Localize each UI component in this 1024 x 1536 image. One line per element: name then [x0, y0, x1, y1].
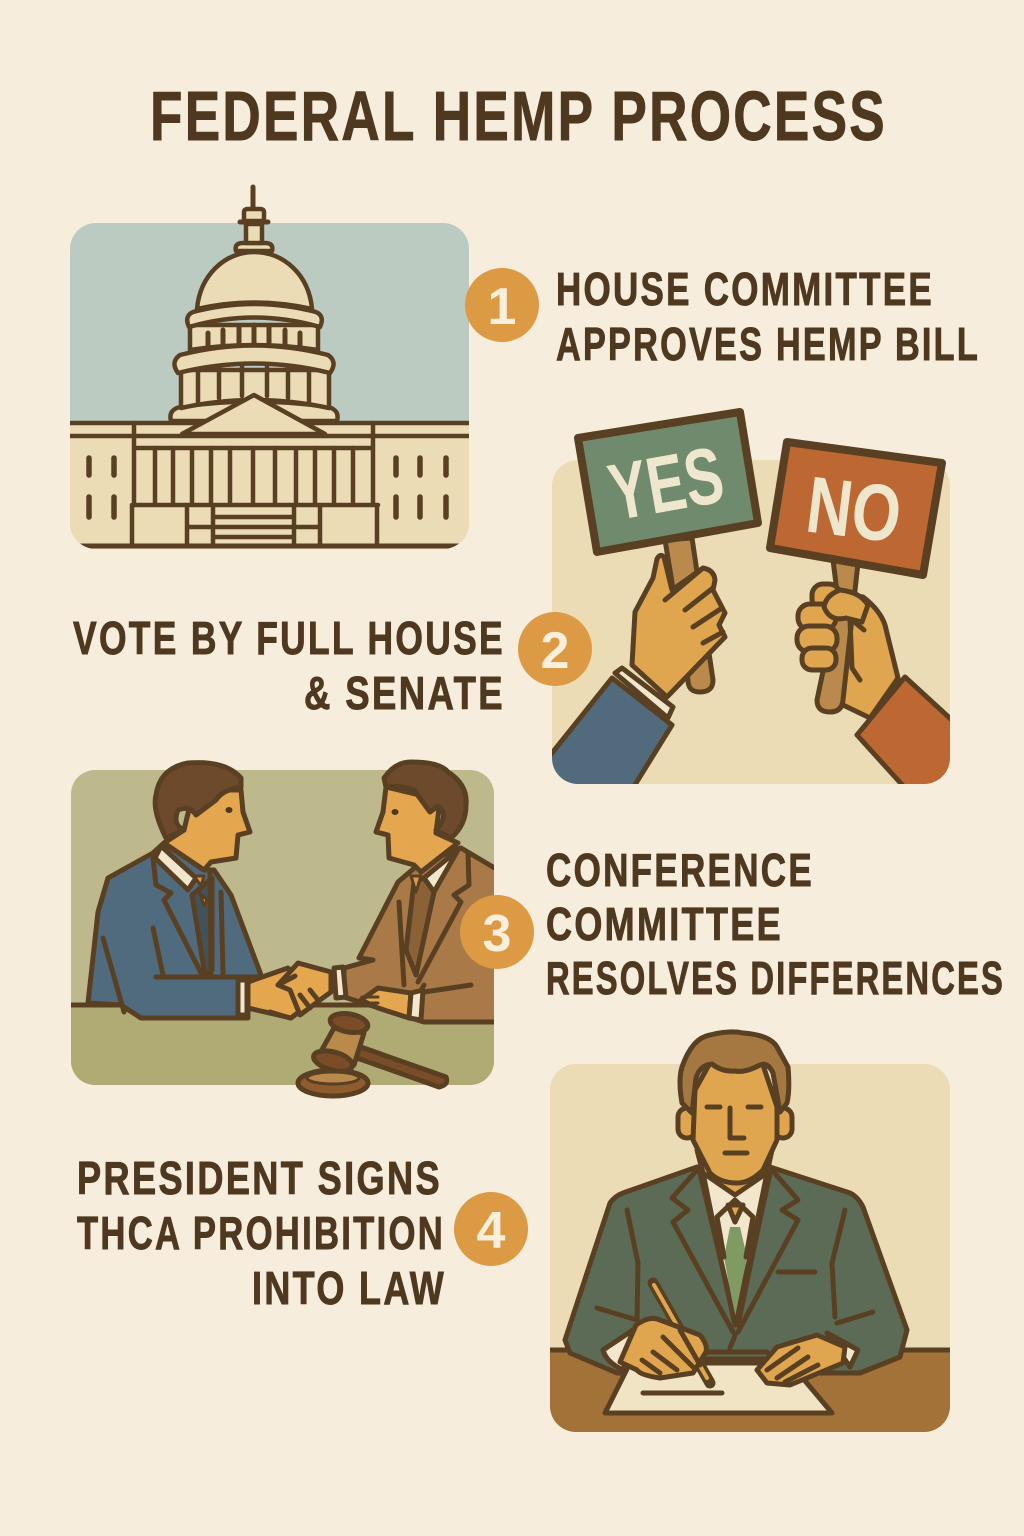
left cuff	[603, 1330, 633, 1370]
step 3 badge: 3	[483, 905, 511, 963]
step 2 badge: 2	[541, 622, 569, 680]
left man's head	[155, 763, 250, 870]
gavel	[298, 1011, 447, 1096]
shirt and tie	[697, 1150, 772, 1320]
step 3 label	[546, 844, 1005, 1004]
sleeve: blue	[548, 678, 672, 788]
step 1 label	[556, 263, 980, 370]
panel: capitol illustration	[70, 187, 469, 552]
step 4 label: THCA PROHIBITION	[77, 1207, 445, 1259]
right cuff	[827, 1333, 858, 1367]
hand: no, fingers	[797, 584, 868, 680]
step 3 label: CONFERENCE	[546, 844, 814, 896]
sign: yes: YES	[602, 430, 730, 537]
sign stick: no	[817, 560, 858, 712]
sleeve: orange	[857, 677, 954, 788]
handshake	[238, 963, 423, 1020]
head	[678, 1032, 792, 1183]
left man's suit	[88, 843, 261, 1018]
right man's head	[376, 762, 466, 872]
right man's suit	[344, 848, 498, 1022]
step 2 label	[73, 612, 505, 719]
sign stick: yes	[665, 538, 713, 692]
sign: yes	[578, 412, 758, 552]
step 1 badge	[465, 268, 539, 342]
step 2 label: VOTE BY FULL HOUSE	[73, 612, 505, 664]
step 3 badge	[460, 895, 534, 969]
pen	[653, 1283, 710, 1383]
panel: president signing	[546, 1032, 954, 1440]
step 2 label: & SENATE	[304, 667, 505, 719]
step 4 label: INTO LAW	[252, 1262, 446, 1314]
panel: handshake negotiators	[68, 762, 498, 1096]
left hand	[620, 1318, 706, 1378]
hand: yes	[632, 555, 725, 697]
right hand	[757, 1335, 845, 1385]
suit	[565, 1167, 907, 1373]
step 3 label: COMMITTEE	[546, 898, 783, 950]
step 4 label	[77, 1152, 446, 1314]
hand: no, back	[826, 593, 898, 718]
step 4 badge: 4	[477, 1202, 506, 1260]
paper	[605, 1363, 832, 1413]
panel: yes and no hands	[548, 412, 954, 788]
cuff: blue sleeve	[615, 668, 673, 718]
sign: no: NO	[802, 460, 906, 559]
lapels	[597, 1170, 873, 1359]
step 1 badge: 1	[488, 278, 516, 336]
step 4 label: PRESIDENT SIGNS	[77, 1152, 442, 1204]
step 4 badge	[454, 1192, 528, 1266]
step 2 badge	[518, 612, 592, 686]
sign: no	[770, 442, 942, 575]
